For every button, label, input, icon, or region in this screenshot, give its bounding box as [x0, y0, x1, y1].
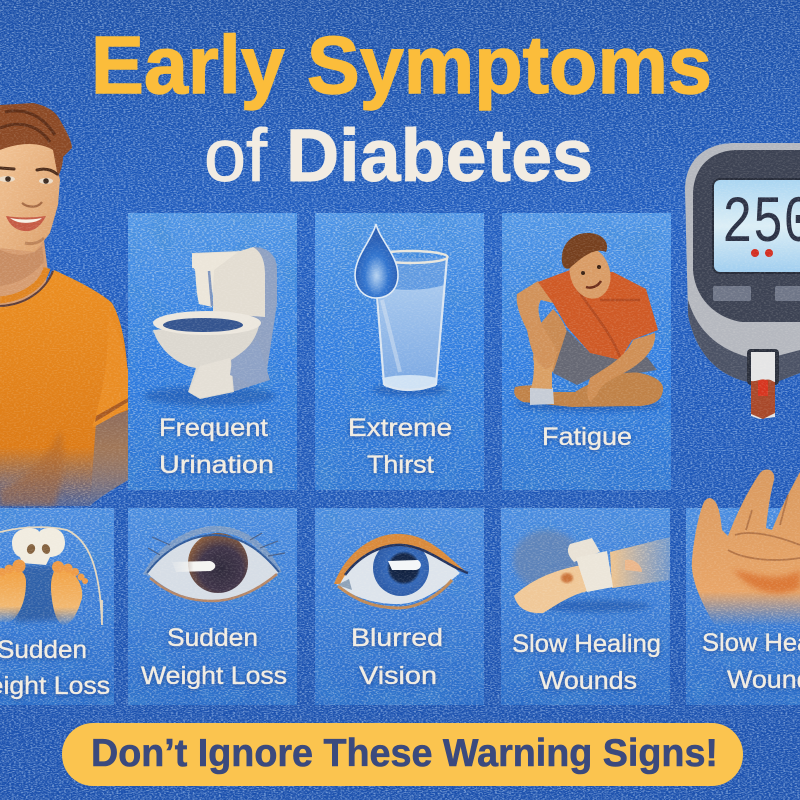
- panel: frequent urination: [128, 213, 297, 490]
- label: slow healing wounds: [512, 630, 661, 695]
- panel: slow healing wounds (arm): [501, 508, 670, 705]
- callout banner: Don’t Ignore These Warning Signs!: [91, 732, 718, 775]
- panel: extreme thirst: [315, 213, 484, 490]
- icon: water glass: [372, 251, 448, 396]
- label: sudden weight loss: [0, 636, 110, 700]
- test strip: [747, 349, 779, 419]
- label: slow healing wounds: [702, 629, 800, 694]
- label: frequent urination: Urination: [159, 451, 274, 479]
- label: sudden weight loss: [141, 624, 287, 690]
- panel: slow healing wounds (hand): [686, 469, 800, 705]
- icon: water drop: [355, 224, 398, 298]
- panel: sudden weight loss (scale): [0, 508, 114, 705]
- title: [91, 20, 712, 197]
- panel: sudden weight loss (eye): [128, 508, 297, 705]
- title line 2: Diabetes: [286, 114, 593, 197]
- label: fatigue: Fatigue: [542, 423, 632, 451]
- icon: blue eye: [334, 534, 468, 608]
- label: blurred vision: Vision: [359, 662, 437, 690]
- label: slow healing wounds: Wounds: [539, 667, 637, 695]
- icon: bandaged arm: [513, 530, 670, 613]
- label: blurred vision: [351, 624, 443, 690]
- label: blurred vision: Blurred: [351, 624, 443, 652]
- meter buttons: [713, 286, 800, 301]
- callout banner: [62, 723, 743, 786]
- illustration: tired man sitting: [514, 233, 666, 412]
- meter screen: [713, 179, 800, 273]
- label: extreme thirst: Extreme: [348, 414, 452, 442]
- label: extreme thirst: Thirst: [367, 451, 434, 479]
- person: smiling young man in orange t-shirt: [0, 103, 128, 506]
- label: sudden weight loss: Weight Loss: [141, 662, 287, 690]
- title line 1: Early Symptoms: [91, 20, 712, 111]
- panel: blurred vision: [315, 508, 484, 705]
- label: sudden weight loss: Sudden: [167, 624, 258, 652]
- glucose meter reading 250: [685, 143, 800, 419]
- indicator dots: [751, 249, 773, 257]
- label: frequent urination: Frequent: [159, 414, 268, 442]
- title line 2: of: [204, 114, 267, 197]
- icon: bathroom scale with feet: [0, 527, 102, 625]
- label: slow healing wounds: Slow Healing: [512, 630, 661, 658]
- icon: palm with wound: [692, 469, 800, 626]
- panel: fatigue: [502, 213, 671, 490]
- label: extreme thirst: [348, 414, 452, 479]
- icon: toilet: [144, 247, 277, 406]
- label: frequent urination: [159, 414, 274, 479]
- icon: brown eye: [146, 529, 285, 601]
